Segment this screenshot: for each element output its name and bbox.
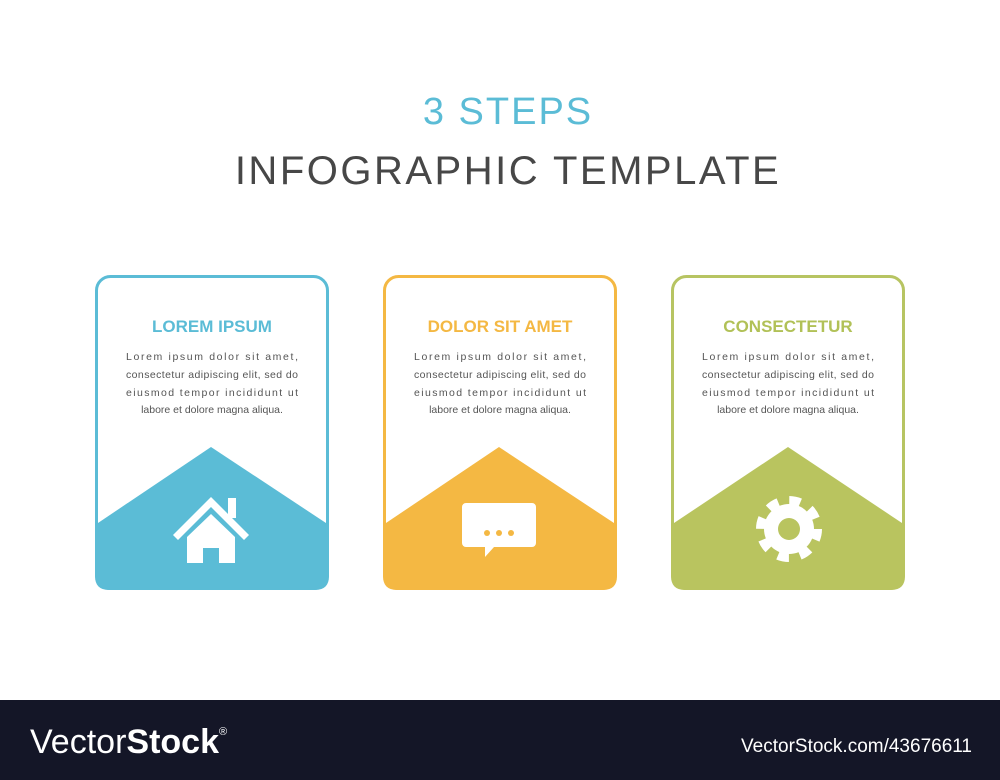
heading: CONSECTETUR: [723, 317, 853, 336]
text block: eiusmod tempor incididunt ut: [414, 387, 586, 399]
text block: eiusmod tempor incididunt ut: [126, 387, 298, 399]
panel: step 1: [95, 276, 329, 590]
text block: labore et dolore magna aliqua.: [429, 404, 571, 416]
heading: DOLOR SIT AMET: [428, 317, 573, 336]
text block: consectetur adipiscing elit, sed do: [702, 369, 874, 381]
title: INFOGRAPHIC TEMPLATE: [235, 149, 781, 193]
text block: Lorem ipsum dolor sit amet,: [702, 351, 874, 363]
text block: labore et dolore magna aliqua.: [717, 404, 859, 416]
footer: ®: [219, 726, 227, 738]
icon: gear: [761, 501, 817, 557]
footer: [0, 700, 1000, 780]
text block: eiusmod tempor incididunt ut: [702, 387, 874, 399]
heading: LOREM IPSUM: [152, 317, 272, 336]
icon: house: [173, 497, 249, 563]
text block: [702, 351, 874, 416]
panel: step 3: [671, 276, 905, 590]
text block: [414, 351, 586, 416]
text block: labore et dolore magna aliqua.: [141, 404, 283, 416]
footer: VectorStock: [30, 723, 219, 761]
text block: Lorem ipsum dolor sit amet,: [126, 351, 298, 363]
icon: speech bubble: [462, 503, 536, 557]
title: [235, 91, 781, 193]
panel: step 2: [383, 276, 617, 590]
text block: consectetur adipiscing elit, sed do: [126, 369, 298, 381]
text block: [126, 351, 298, 416]
text block: Lorem ipsum dolor sit amet,: [414, 351, 586, 363]
title: 3 STEPS: [423, 91, 593, 133]
text block: consectetur adipiscing elit, sed do: [414, 369, 586, 381]
footer: VectorStock.com/43676611: [741, 736, 972, 757]
